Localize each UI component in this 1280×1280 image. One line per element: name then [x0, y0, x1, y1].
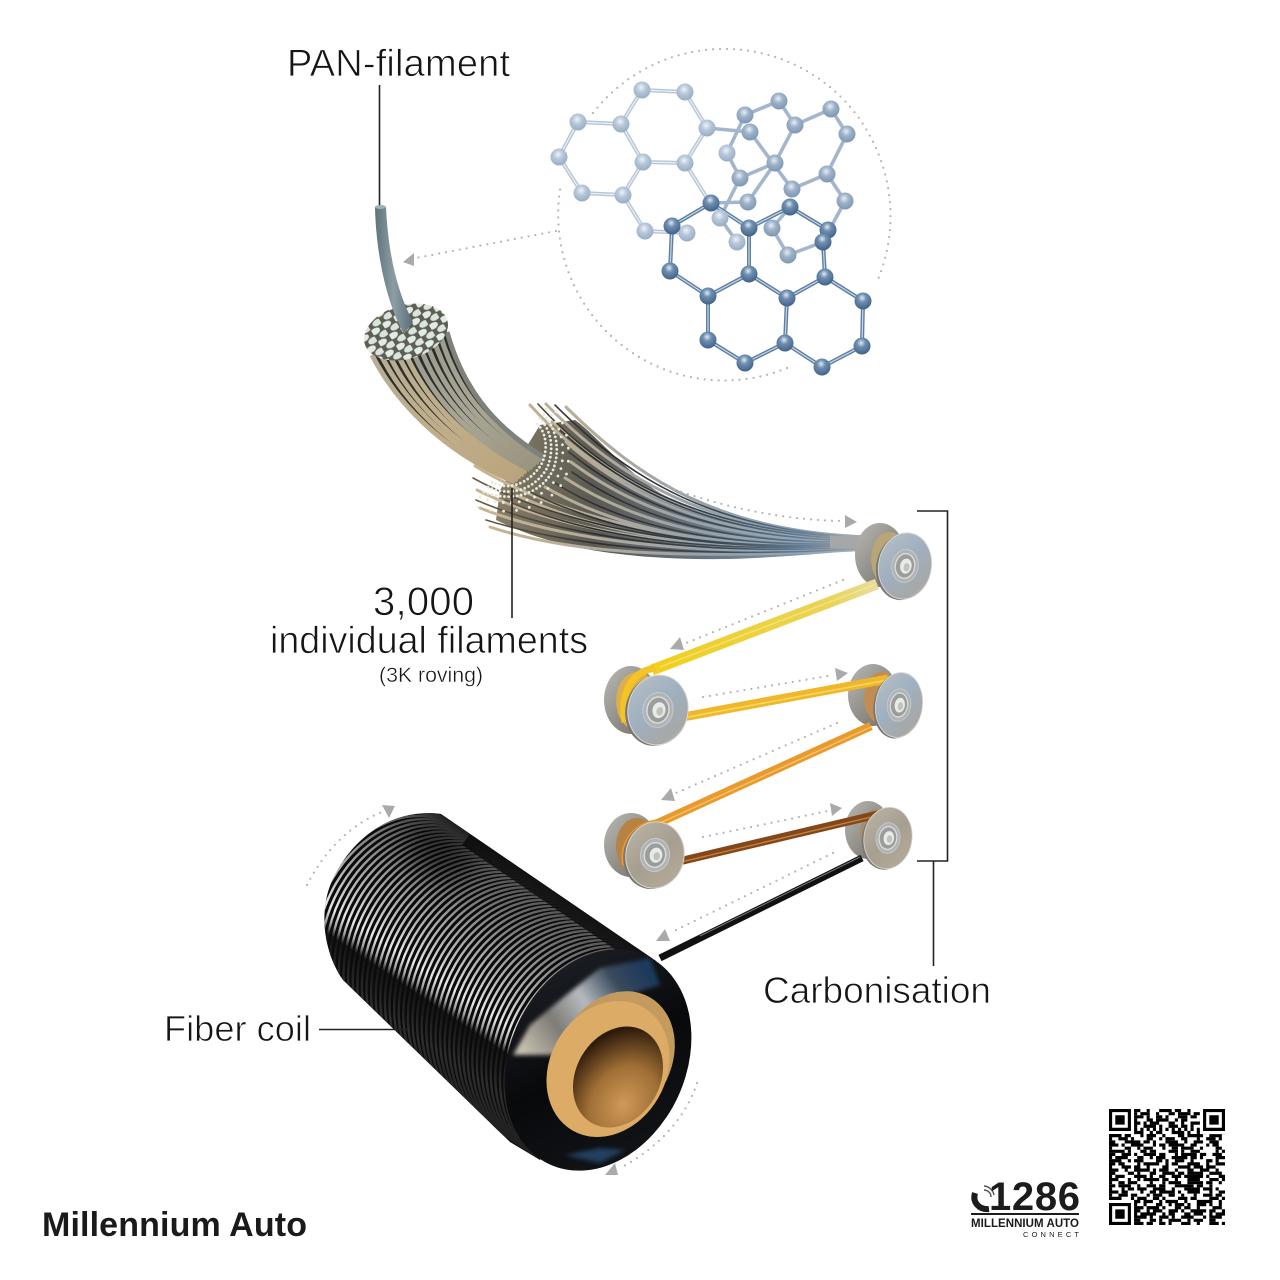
QR code — [1109, 1109, 1225, 1225]
filament count label: (3K roving) — [379, 663, 483, 687]
coil rotation arrows — [307, 805, 697, 1175]
coil face sheen — [513, 958, 660, 1163]
brand name: Millennium Auto — [42, 1206, 307, 1244]
dotted circle around molecule — [558, 49, 891, 380]
single PAN filament tube — [375, 205, 413, 334]
coil end face — [470, 919, 726, 1201]
belts between rollers — [624, 584, 888, 958]
coil body — [324, 813, 656, 1160]
rollers front flanges — [618, 528, 937, 894]
carbonisation bracket and label: Carbonisation — [763, 970, 991, 1011]
cardboard core — [532, 969, 698, 1147]
orange belt — [656, 726, 871, 824]
back hexagon layer — [559, 90, 863, 367]
light fan strands — [475, 404, 870, 554]
carbonisation bracket and label — [763, 511, 991, 1011]
golden belt — [683, 679, 888, 717]
process arrows along rollers — [656, 487, 857, 941]
phone icon — [974, 1186, 994, 1209]
black carbon fibre — [660, 858, 862, 958]
upper strands — [410, 332, 545, 470]
light atoms — [550, 82, 746, 250]
orange wrap on roller — [624, 822, 658, 865]
fiber coil label: Fiber coil — [164, 1008, 311, 1049]
fibre fan bundle leading to first pulley — [473, 404, 880, 559]
brown belt — [681, 813, 884, 861]
rollers back flanges — [604, 523, 907, 877]
main filament bundle body — [372, 332, 545, 482]
1286 connect logo: MILLENNIUM AUTO — [971, 1218, 1079, 1230]
1286 connect logo — [971, 1175, 1080, 1239]
core hole — [555, 1010, 681, 1144]
yellow belt — [652, 584, 877, 670]
filament count label: 3,000 — [373, 580, 474, 624]
filament count label: individual filaments — [270, 619, 588, 661]
fiber coil — [324, 813, 692, 1171]
arrow: molecule to filament — [403, 231, 556, 266]
molecular lattice diagram — [550, 82, 872, 376]
title: PAN-filament label: PAN-filament — [287, 43, 510, 85]
middle atoms — [732, 92, 856, 264]
1286 connect logo: 1286 — [989, 1175, 1080, 1219]
fan base mass — [496, 420, 870, 559]
1286 connect logo: CONNECT — [1023, 1230, 1079, 1239]
filament count label — [270, 488, 588, 687]
front atoms — [662, 194, 872, 376]
yellow wrap on roller — [624, 668, 655, 722]
coil winding stripes — [324, 813, 656, 1160]
lower strands — [372, 346, 527, 482]
gray end of the fan — [830, 536, 880, 548]
filament tips crescent — [478, 405, 569, 511]
QR finder patterns — [1109, 1109, 1225, 1225]
dark fan strands — [473, 404, 870, 552]
bundle end face with cut filaments — [357, 294, 455, 370]
